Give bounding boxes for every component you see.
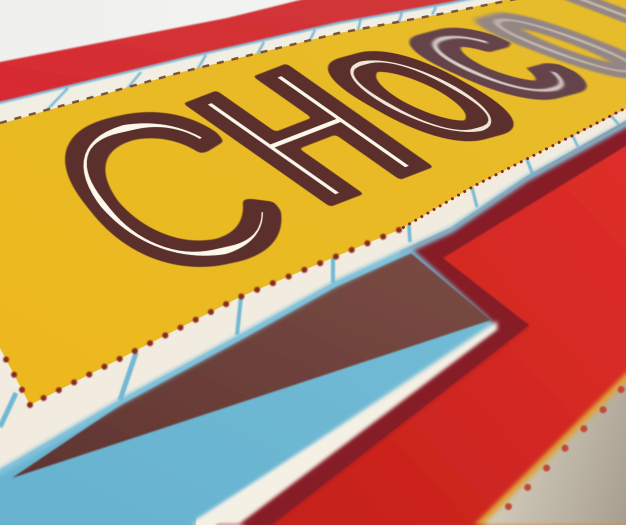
letter H: H xyxy=(141,35,476,236)
dark red sliver edge xyxy=(240,325,529,525)
dotted panel edges xyxy=(0,0,626,405)
title text CHOCOLATE xyxy=(0,0,626,319)
brown triangle xyxy=(12,253,491,478)
bottom edge colour strip xyxy=(0,516,626,525)
dark red chevron border xyxy=(215,100,626,525)
upper red band xyxy=(0,0,626,115)
yellow title panel xyxy=(0,0,626,405)
letter C: C xyxy=(0,62,343,319)
letter C: C xyxy=(365,11,626,118)
lower white ruled strip xyxy=(0,90,626,490)
letter O: O xyxy=(276,27,568,167)
upper white ruled strip xyxy=(0,0,626,135)
cream corner panel xyxy=(474,339,626,525)
blue triangle xyxy=(0,248,497,525)
white sliver xyxy=(192,321,497,525)
main red field xyxy=(260,80,626,525)
